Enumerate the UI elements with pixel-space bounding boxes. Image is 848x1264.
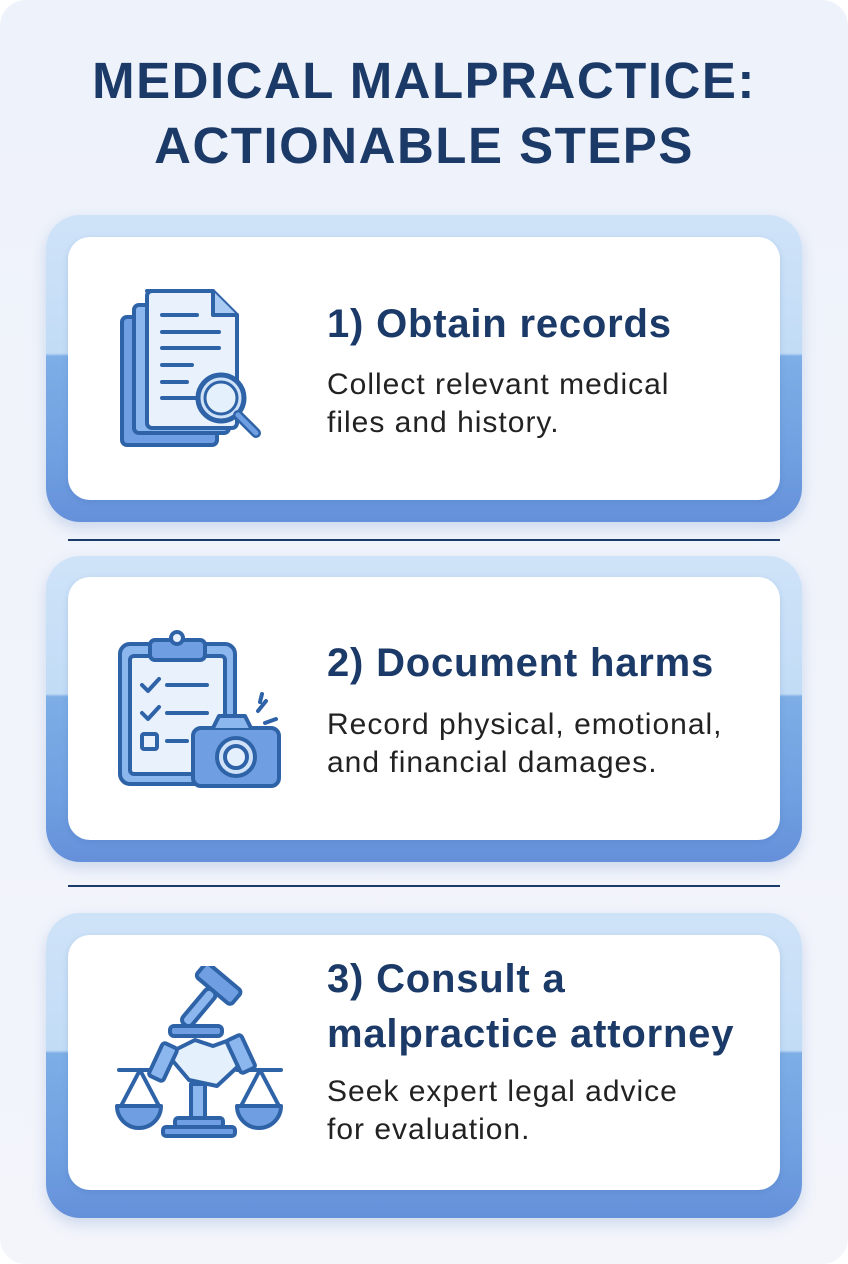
title — [92, 52, 756, 174]
heading: step 3 — [327, 957, 734, 1056]
text: step 2: Record physical, emotional, — [327, 708, 723, 741]
panel: step 1 — [40, 215, 808, 534]
text: step 3: Seek expert legal advice — [327, 1075, 678, 1108]
text: step 1: files and history. — [327, 406, 560, 439]
text: step 3: for evaluation. — [327, 1113, 530, 1146]
title: ACTIONABLE STEPS — [154, 117, 694, 174]
heading: step 2: 2) Document harms — [327, 641, 714, 685]
title: MEDICAL MALPRACTICE: — [92, 52, 756, 109]
panel: step 2 — [40, 556, 808, 874]
heading: step 3: 3) Consult a — [327, 957, 566, 1001]
icon: scales, gavel and handshake — [115, 966, 283, 1138]
icon: clipboard with camera — [118, 630, 281, 788]
heading: step 1: 1) Obtain records — [327, 302, 672, 346]
panel: step 3 — [40, 913, 808, 1230]
text: step 1 — [327, 368, 669, 439]
heading: step 3: malpractice attorney — [327, 1012, 734, 1056]
text: step 3 — [327, 1075, 678, 1146]
text: step 2: and financial damages. — [327, 746, 658, 779]
text: step 1: Collect relevant medical — [327, 368, 669, 401]
icon: documents with magnifier — [120, 289, 261, 447]
text: step 2 — [327, 708, 723, 779]
